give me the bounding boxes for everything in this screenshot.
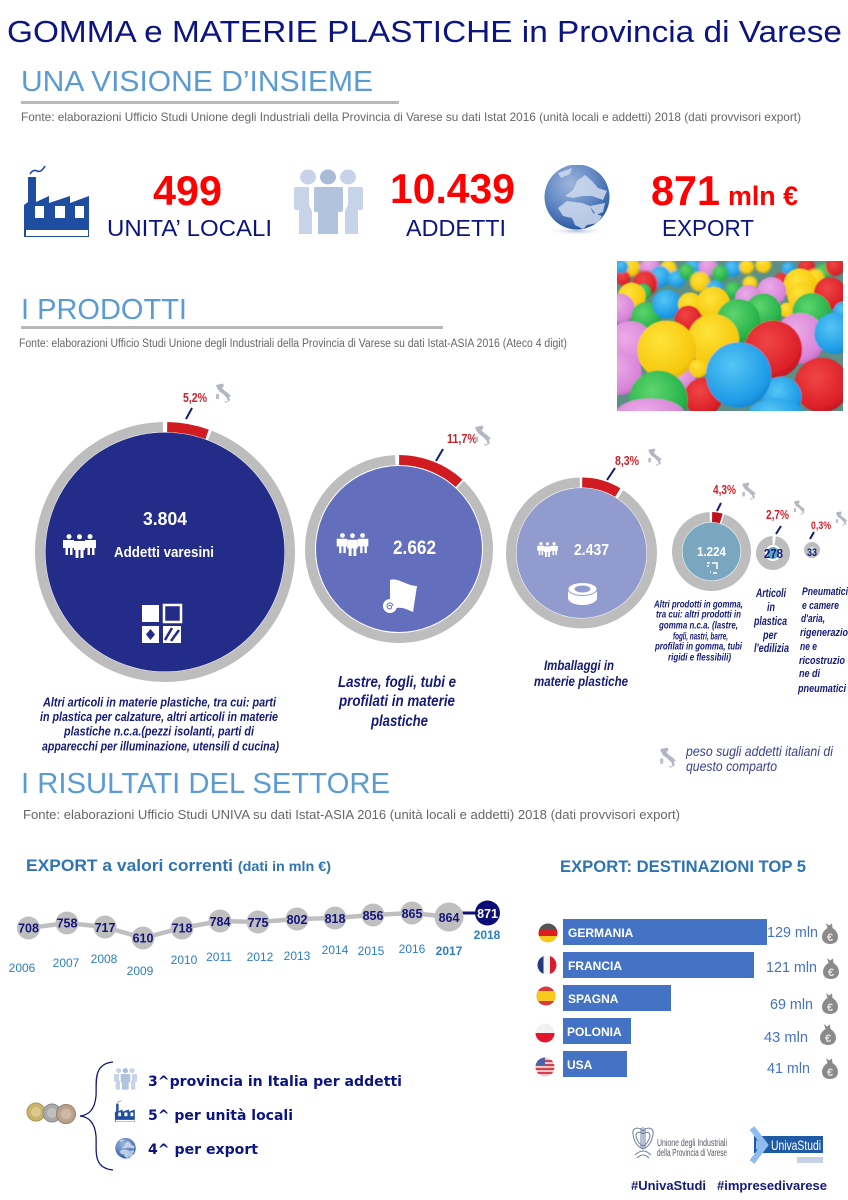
line chart: export by year: 718 <box>172 922 192 936</box>
line chart: export by year: 610 <box>133 932 153 946</box>
heading: i risultati del settore: I RISULTATI DEL SETTORE <box>21 768 390 800</box>
source note: products: Fonte: elaborazioni Ufficio Studi Unione degli Industriali della Provincia di Varese su dati Istat-ASIA 2016 (Ateco 4 digit) <box>19 338 567 350</box>
bubble: lastre fogli tubi: 2.662 <box>393 538 436 559</box>
logo: univastudi <box>752 1128 823 1163</box>
bubble: altri articoli in materie plastiche: 3.804 <box>143 509 187 529</box>
line chart: export by year: 2010 <box>171 953 198 967</box>
caption: altri articoli <box>40 696 279 754</box>
row: usa: USA <box>567 1058 593 1072</box>
row: spagna: 69 mln <box>770 996 813 1013</box>
line chart: export by year: 2017 <box>436 944 463 958</box>
caption: lastre fogli tubi: profilati in materie <box>338 693 455 710</box>
row: polonia: 43 mln <box>764 1029 808 1046</box>
chart title: export a valori correnti: EXPORT a valori correnti (dati in mln €) <box>26 856 331 875</box>
share label: 2,7% <box>766 500 805 534</box>
bubble: pneumatici: 33 <box>807 547 817 559</box>
caption: articoli per l'edilizia <box>753 588 789 655</box>
caption: altri prodotti in gomma: fogli, nastri, barre, <box>673 630 728 642</box>
bar chart: top 5 destinations <box>535 919 839 1079</box>
line chart: export by year: 864 <box>439 911 459 925</box>
share label: 2,7%: 2,7% <box>766 507 789 522</box>
kpi: unita locali <box>107 167 272 241</box>
ranking: export <box>115 1138 258 1160</box>
share label: 11,7%: 11,7% <box>447 431 477 446</box>
line chart: export by year: 2006 <box>9 961 36 975</box>
caption: altri prodotti in gomma <box>653 598 743 664</box>
share label: 11,7% <box>436 426 491 461</box>
kpi: addetti: 10.439 <box>390 165 515 212</box>
row: francia: 121 mln <box>766 959 817 976</box>
ranking: unita locali <box>115 1100 293 1124</box>
logo: univastudi: UnivaStudi <box>771 1137 821 1153</box>
ranking: unita locali: 5^ per unità locali <box>148 1108 293 1124</box>
kpi: export: mln € <box>728 181 798 211</box>
photo: colored plastic balls <box>617 261 843 411</box>
line chart: export by year: 2014 <box>322 943 349 957</box>
row: francia <box>537 952 839 979</box>
line chart: export by year: 2011 <box>206 950 232 964</box>
share label: 0,3%: 0,3% <box>811 520 831 532</box>
caption: altri prodotti in gomma: gomma n.c.a. (lastre, <box>658 620 738 632</box>
row: germania <box>538 919 838 945</box>
caption: altri articoli: plastiche n.c.a.(pezzi isolanti, parti di <box>63 724 254 738</box>
caption: articoli per l'edilizia: l'edilizia <box>754 643 789 655</box>
share label: 4,3% <box>713 482 756 511</box>
line chart: export by year: 2015 <box>358 944 385 958</box>
caption: altri articoli: in plastica per calzature, altri articoli in materie <box>40 710 278 724</box>
bubble: lastre fogli tubi <box>273 423 525 675</box>
row: spagna: SPAGNA <box>568 992 619 1006</box>
icon: people <box>294 170 363 234</box>
caption: imballaggi: Imballaggi in <box>544 657 614 673</box>
bubble: altri prodotti in gomma <box>668 508 755 595</box>
line chart: export by year: 818 <box>325 912 345 926</box>
line chart: export by year: 856 <box>363 909 383 923</box>
caption: altri prodotti in gomma: profilati in gomma, tubi <box>654 640 743 652</box>
row: usa <box>535 1051 838 1079</box>
kpi: unita locali: 499 <box>153 167 222 214</box>
legend: peso sugli addetti italiani <box>660 743 834 774</box>
row: spagna <box>536 985 838 1014</box>
caption: altri prodotti in gomma: rigidi e flessibili) <box>668 652 731 664</box>
icon: medals <box>27 1103 76 1124</box>
heading: i prodotti: I PRODOTTI <box>21 294 187 326</box>
kpi: unita locali: UNITA’ LOCALI <box>107 215 272 241</box>
caption: articoli per l'edilizia: in <box>767 602 775 614</box>
caption: altri prodotti in gomma: Altri prodotti in gomma, <box>653 598 743 610</box>
icon: factory <box>24 166 89 237</box>
caption: pneumatici: ne di <box>799 668 821 680</box>
kpi: addetti <box>390 165 515 241</box>
bubble: articoli per l'edilizia <box>759 539 787 567</box>
bubble: altri articoli in materie plastiche <box>4 391 326 713</box>
caption: altri articoli: Altri articoli in materie plastiche, tra cui: parti <box>42 696 276 710</box>
row: polonia <box>535 1018 836 1046</box>
caption: lastre fogli tubi: plastiche <box>370 713 428 730</box>
logo: unione degli industriali: Unione degli Industriali <box>657 1138 727 1149</box>
line chart: export by year <box>9 900 501 978</box>
kpi: addetti: ADDETTI <box>406 215 506 241</box>
bubble: pneumatici <box>804 542 820 559</box>
share label: 4,3%: 4,3% <box>713 482 736 497</box>
bubble: imballaggi <box>484 455 679 651</box>
caption: altri prodotti in gomma: tra cui: altri prodotti in <box>656 608 741 620</box>
ranking: addetti <box>114 1068 402 1090</box>
kpi: export <box>651 167 798 241</box>
logo: unione degli industriali <box>633 1127 727 1159</box>
chart title: destinazioni top 5: EXPORT: DESTINAZIONI TOP 5 <box>560 857 806 876</box>
source note: results: Fonte: elaborazioni Ufficio Studi UNIVA su dati Istat-ASIA 2016 (unità locali e addetti) 2018 (dati provvisori export) <box>23 807 680 822</box>
brace <box>80 1062 113 1170</box>
row: germania: 129 mln <box>767 924 818 941</box>
line chart: export by year: 2018 <box>474 928 501 942</box>
line chart: export by year: 775 <box>248 916 268 930</box>
caption: altri articoli: apparecchi per illuminazione, utensili d cucina) <box>42 740 279 754</box>
line chart: export by year: 2007 <box>53 956 80 970</box>
bubble: altri articoli in materie plastiche: Addetti varesini <box>114 544 214 561</box>
bubble: altri prodotti in gomma: 1.224 <box>697 544 727 559</box>
ranking: export: 4^ per export <box>148 1142 258 1158</box>
line chart: export by year: 708 <box>18 922 39 936</box>
line chart: export by year: 2016 <box>399 942 426 956</box>
line chart: export by year: 2013 <box>284 949 311 963</box>
hashtags: #UnivaStudi <box>631 1178 706 1193</box>
caption: articoli per l'edilizia: Articoli <box>755 588 787 600</box>
line chart: export by year: 717 <box>95 921 115 935</box>
line chart: export by year: 2012 <box>247 950 274 964</box>
caption: lastre fogli tubi <box>338 674 456 730</box>
row: germania: GERMANIA <box>568 926 634 940</box>
logo: unione degli industriali: della Provincia di Varese <box>657 1148 727 1159</box>
row: usa: 41 mln <box>767 1060 810 1077</box>
line chart: export by year: 784 <box>210 915 230 929</box>
kpi: export: 871 <box>651 167 720 214</box>
caption: pneumatici <box>797 586 848 695</box>
caption: articoli per l'edilizia: per <box>762 630 777 642</box>
hashtags: #impresedivarese <box>717 1178 827 1193</box>
legend: peso sugli addetti italiani: questo comparto <box>686 758 777 774</box>
caption: pneumatici: ne e <box>800 641 817 653</box>
icon: globe <box>544 164 610 236</box>
caption: imballaggi <box>534 657 628 689</box>
bubble: imballaggi: 2.437 <box>574 542 609 559</box>
line chart: export by year: 758 <box>57 916 77 930</box>
line chart: export by year: 871 <box>477 907 498 921</box>
kpi: export: EXPORT <box>662 215 754 241</box>
heading: una visione d'insieme: UNA VISIONE D’INSIEME <box>21 66 373 98</box>
caption: lastre fogli tubi: Lastre, fogli, tubi e <box>338 674 456 691</box>
row: polonia: POLONIA <box>567 1025 622 1039</box>
row: francia: FRANCIA <box>568 959 622 973</box>
title: GOMMA e MATERIE PLASTICHE in Provincia di Varese <box>7 14 842 49</box>
hashtags <box>631 1178 827 1193</box>
line chart: export by year: 2008 <box>91 952 118 966</box>
bubble: articoli per l'edilizia: 278 <box>764 546 783 561</box>
caption: imballaggi: materie plastiche <box>534 673 628 689</box>
share label: 5,2%: 5,2% <box>183 390 207 405</box>
caption: articoli per l'edilizia: plastica <box>753 616 787 628</box>
caption: pneumatici: d'aria, <box>801 613 825 625</box>
source note: overview: Fonte: elaborazioni Ufficio Studi Unione degli Industriali della Provincia di Varese su dati Istat 2016 (unità locali e addetti) 2018 (dati provvisori export) <box>21 110 801 124</box>
share label: 5,2% <box>183 384 231 419</box>
line chart: export by year: 865 <box>402 907 422 921</box>
line chart: export by year: 2009 <box>127 964 154 978</box>
share label: 8,3% <box>607 448 662 480</box>
share label: 8,3%: 8,3% <box>615 453 639 468</box>
ranking: addetti: 3^provincia in Italia per addetti <box>148 1074 402 1090</box>
share label: 0,3% <box>810 511 847 539</box>
line chart: export by year: 802 <box>287 913 307 927</box>
